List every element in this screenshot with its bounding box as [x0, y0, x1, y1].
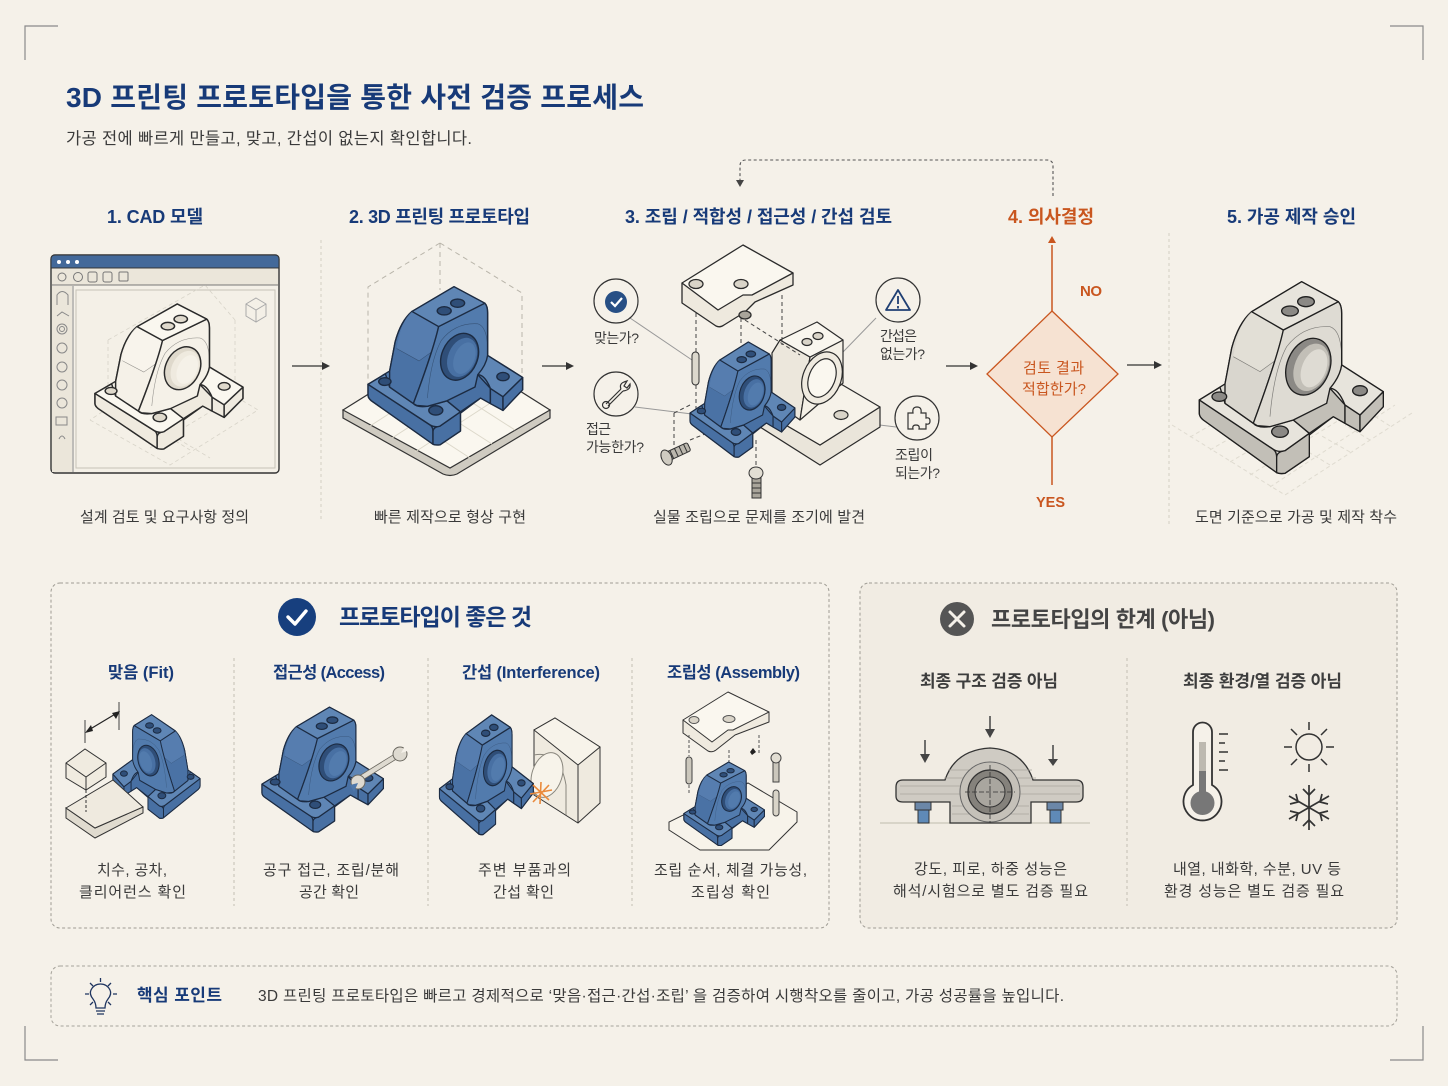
column: fit: 치수, 공차,: [97, 862, 167, 879]
step captions: [80, 509, 1397, 526]
column: structure: 해석/시험으로 별도 검증 필요: [893, 883, 1088, 900]
panel heading: 프로토타입의 한계 (아님): [991, 607, 1215, 632]
build volume dashes: [368, 243, 522, 395]
column: assembly: 조립성 (Assembly): [667, 663, 800, 682]
arrow: step 4 to 5: [1127, 361, 1162, 369]
callout: fit check: 맞는가?: [594, 330, 639, 346]
arrow: step 2 to 3: [542, 362, 574, 370]
step 3 heading: 3. 조립 / 적합성 / 접근성 / 간섭 검토: [625, 207, 892, 227]
key point text: 3D 프린팅 프로토타입은 빠르고 경제적으로 ‘맞음·접근·간섭·조립’ 을 검증하여 시행착오를 줄이고, 가공 성공률을 높입니다.: [258, 987, 1064, 1005]
blue prototype part: [368, 287, 523, 445]
faint grid: [1172, 368, 1412, 495]
build plate: [343, 410, 550, 476]
column: assembly: [654, 663, 807, 901]
column: access: 공구 접근, 조립/분해: [263, 862, 399, 879]
callout: interference check: [876, 278, 925, 362]
key point bar: [51, 966, 1397, 1026]
column: access: [262, 663, 411, 901]
step captions: 도면 기준으로 가공 및 제작 착수: [1195, 509, 1397, 526]
callout: fit check: [594, 279, 639, 346]
fit illustration: [66, 702, 200, 838]
decision: NO branch arrow: [1048, 236, 1056, 312]
callout: access check: 접근: [586, 421, 611, 437]
column: structure: 최종 구조 검증 아님: [920, 672, 1058, 691]
step 1: CAD window illustration: [51, 255, 279, 473]
CAD part: [95, 304, 243, 449]
column: assembly: 조립 순서, 체결 가능성,: [654, 862, 807, 879]
column: fit: 클리어런스 확인: [79, 884, 186, 901]
column: assembly: 조립성 확인: [691, 884, 770, 901]
column: fit: [66, 663, 200, 901]
callout: interference check: 없는가?: [880, 346, 925, 362]
toolbar: [52, 269, 278, 285]
step 4 heading: 4. 의사결정: [1008, 207, 1094, 227]
column: environment: 내열, 내화학, 수분, UV 등: [1173, 861, 1341, 878]
sidebar tools: [52, 286, 73, 472]
bottom bolt: [749, 467, 763, 498]
step 2: printed prototype illustration: [343, 243, 550, 476]
arrow: step 3 to 4: [946, 362, 978, 370]
side bolt: [659, 440, 693, 467]
icon: snowflake: [1289, 785, 1329, 830]
step captions: 빠른 제작으로 형상 구현: [374, 509, 526, 526]
column: interference: 주변 부품과의: [478, 862, 571, 879]
key point label: 핵심 포인트: [137, 986, 222, 1005]
column: access: 접근성 (Access): [273, 663, 385, 682]
alignment pin: [692, 352, 699, 385]
step 5 heading: 5. 가공 제작 승인: [1227, 207, 1356, 227]
column: environment: 최종 환경/열 검증 아님: [1183, 672, 1342, 691]
assembly dashed guides: [674, 292, 800, 468]
arrow: step 1 to 2: [292, 362, 330, 370]
step captions: 실물 조립으로 문제를 조기에 발견: [653, 509, 865, 526]
feedback loop dashed arrow: [736, 160, 1053, 196]
structural load illustration: [880, 716, 1090, 823]
column: structure: 강도, 피로, 하중 성능은: [914, 861, 1067, 878]
step 3: exploded assembly illustration: [586, 245, 940, 498]
icon: view cube: [246, 298, 266, 322]
column: interference: 간섭 (Interference): [462, 663, 600, 682]
lower base plate: [760, 360, 880, 465]
icon: sun: [1284, 722, 1334, 772]
callout: access check: 가능한가?: [586, 439, 644, 455]
decision diamond: 검토 결과: [1023, 360, 1084, 377]
panel: prototype limits: [860, 583, 1397, 928]
icon: thermometer: [1184, 723, 1228, 820]
column: interference: [439, 663, 600, 901]
column: interference: 간섭 확인: [493, 884, 554, 901]
callout: assembly check: [895, 396, 940, 481]
column: environment: [1164, 672, 1344, 900]
label: NO: NO: [1080, 283, 1102, 300]
decision: YES branch line: [1051, 437, 1053, 485]
leader lines: [630, 318, 896, 427]
column: fit: 맞음 (Fit): [108, 663, 174, 682]
assembly illustration: [669, 692, 797, 850]
column: environment: 환경 성능은 별도 검증 필요: [1164, 883, 1344, 900]
interference illustration: [439, 715, 600, 835]
column: access: 공간 확인: [299, 884, 359, 901]
panel heading: 프로토타입이 좋은 것: [339, 604, 532, 630]
step 5: machined metal part illustration: [1172, 282, 1412, 495]
white housing block: [772, 322, 850, 420]
subtitle: 가공 전에 빠르게 만들고, 맞고, 간섭이 없는지 확인합니다.: [66, 129, 472, 148]
step 2 heading: 2. 3D 프린팅 프로토타입: [349, 207, 530, 227]
access illustration: [262, 707, 411, 832]
icon: x badge: [940, 602, 974, 636]
callout: access check: [586, 372, 644, 455]
decision diamond: 적합한가?: [1022, 381, 1086, 398]
callout: interference check: 간섭은: [880, 328, 917, 344]
title: 3D 프린팅 프로토타입을 통한 사전 검증 프로세스: [66, 82, 644, 113]
decision diamond: [987, 311, 1118, 437]
icon: light bulb: [85, 978, 117, 1014]
step 1 heading: 1. CAD 모델: [107, 207, 203, 227]
icon: check badge: [278, 598, 316, 636]
column: structure: [880, 672, 1090, 900]
canvas frame and grid: [76, 285, 275, 468]
step captions: 설계 검토 및 요구사항 정의: [80, 509, 249, 526]
blue part: [690, 342, 795, 457]
callout: assembly check: 조립이: [895, 447, 933, 463]
panel: prototype benefits: [51, 583, 829, 928]
step dividers: [321, 233, 1169, 525]
top cover plate: [682, 245, 793, 327]
label: YES: YES: [1036, 495, 1065, 511]
window title bar: [51, 255, 279, 268]
callout: assembly check: 되는가?: [895, 465, 940, 481]
